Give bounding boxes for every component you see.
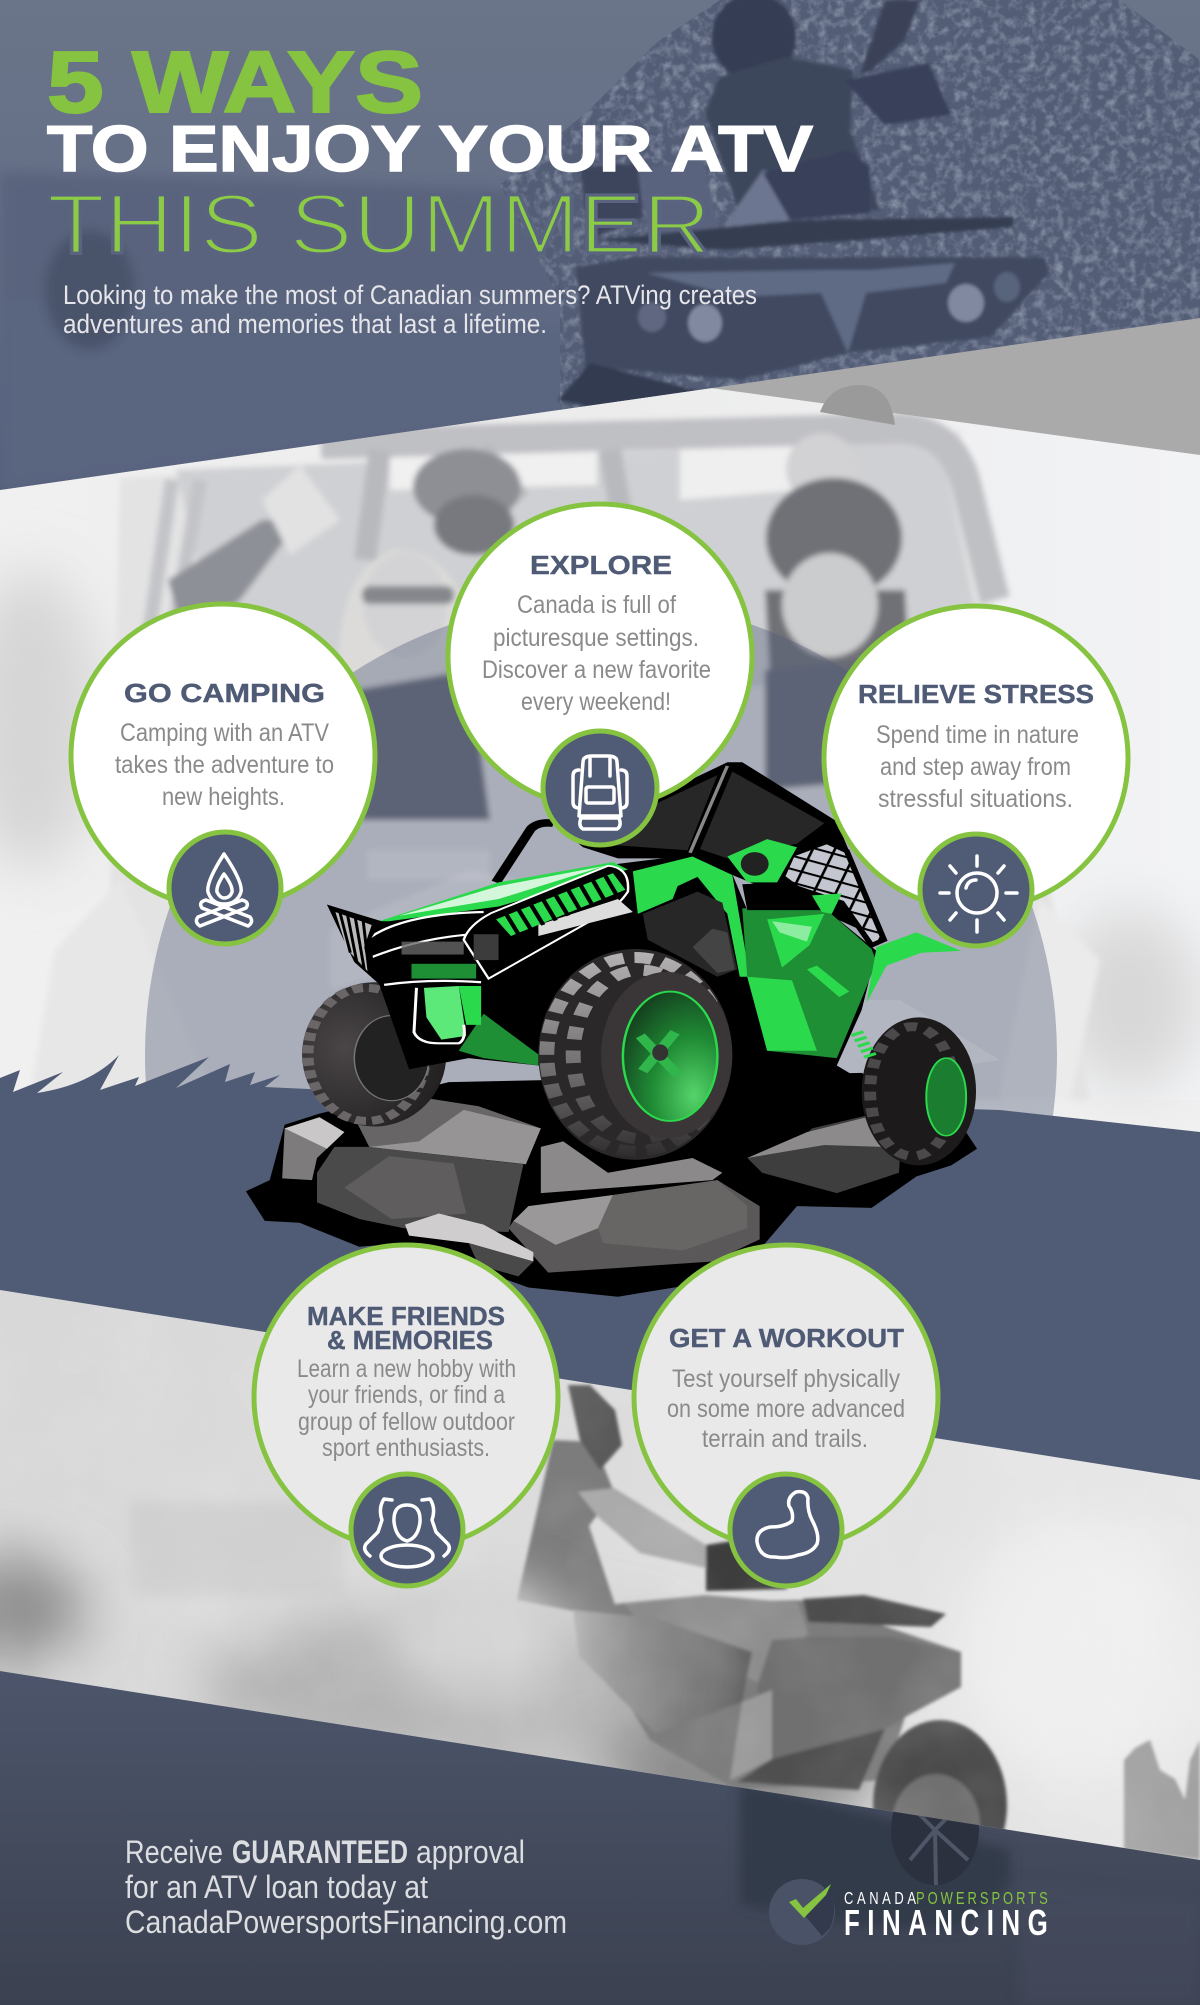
card: get a workout: on some more advanced (667, 1395, 905, 1423)
green body panels (379, 857, 961, 1066)
card: relieve stress: Spend time in nature (876, 721, 1079, 749)
translucent slate dome behind circles (145, 624, 1057, 1116)
card: make friends and memories: group of fellow outdoor (298, 1408, 515, 1436)
lower photo: quad rider in smoke (0, 1280, 1200, 1890)
rock shadow (246, 1073, 977, 1297)
headlight grille (464, 866, 633, 979)
card: relieve stress: RELIEVE STRESS (858, 679, 1094, 709)
card: make friends and memories: sport enthusiasts. (322, 1434, 490, 1462)
card: explore: EXPLORE (530, 550, 672, 580)
icon: flexed arm (730, 1474, 842, 1586)
background: mid section base (0, 300, 1200, 1100)
title (47, 34, 813, 271)
card: make friends and memories: & MEMORIES (327, 1325, 493, 1355)
intro text: Looking to make the most of Canadian summers? ATVing creates (63, 280, 757, 310)
card: go camping: Camping with an ATV (120, 719, 329, 747)
rear wheel (857, 1017, 976, 1165)
card: get a workout: Test yourself physically (672, 1365, 900, 1393)
footer call to action: CanadaPowersportsFinancing.com (125, 1904, 567, 1940)
card: explore: Canada is full of (517, 591, 676, 619)
roof and roll cage (496, 762, 887, 945)
card: go camping (71, 604, 375, 944)
card: get a workout: terrain and trails. (702, 1425, 868, 1453)
rocks (282, 1097, 901, 1276)
card: explore (448, 504, 752, 845)
icon: group of people (351, 1474, 463, 1586)
title: TO ENJOY YOUR ATV (47, 112, 813, 185)
card: go camping: takes the adventure to (115, 751, 334, 779)
intro text (63, 280, 757, 339)
card: go camping: GO CAMPING (124, 678, 325, 708)
footer call to action: for an ATV loan today at (125, 1869, 428, 1905)
footer call to action: approval (416, 1834, 525, 1870)
driver helmet (727, 839, 797, 882)
icon: campfire (169, 832, 281, 944)
card: get a workout: GET A WORKOUT (669, 1323, 904, 1353)
title: THIS SUMMER (47, 177, 711, 271)
logo: Canada Powersports Financing: FINANCING (844, 1903, 1048, 1943)
logo: Canada Powersports Financing: CANADA (844, 1889, 916, 1909)
logo: Canada Powersports Financing (769, 1879, 1048, 1945)
front grille and guard (327, 905, 484, 986)
card: explore: Discover a new favorite (482, 656, 711, 684)
icon: backpack (543, 731, 657, 845)
intro text: adventures and memories that last a lifetime. (63, 309, 547, 339)
footer call to action: Receive (125, 1834, 223, 1870)
card: relieve stress (824, 606, 1128, 946)
card: relieve stress: and step away from (880, 753, 1071, 781)
left wheel (302, 982, 446, 1127)
card: get a workout (634, 1245, 938, 1586)
chassis silhouette (327, 855, 877, 1114)
title: 5 WAYS (47, 34, 423, 131)
header: top slate photo panel (0, 0, 1200, 500)
illustration: green side-by-side on rocks (246, 762, 977, 1297)
footer call to action (125, 1834, 567, 1940)
card: relieve stress: stressful situations. (878, 785, 1073, 813)
footer call to action: GUARANTEED (232, 1834, 408, 1870)
icon: sun (920, 834, 1032, 946)
logo: Canada Powersports Financing: POWERSPORTS (916, 1889, 1048, 1909)
card: make friends and memories: your friends, or find a (308, 1381, 505, 1409)
card: explore: every weekend! (521, 688, 671, 716)
footer: dark slate panel (0, 1671, 1200, 2005)
photo: people in side-by-side vehicle (0, 428, 1200, 1100)
front wheel (538, 949, 732, 1160)
card: explore: picturesque settings. (493, 624, 699, 652)
band: slate diagonal with grass edge (0, 1055, 1200, 1500)
card: go camping: new heights. (162, 783, 285, 811)
card: make friends and memories (254, 1245, 558, 1586)
card: make friends and memories: Learn a new hobby with (297, 1355, 516, 1383)
card: make friends and memories: MAKE FRIENDS (307, 1301, 505, 1331)
